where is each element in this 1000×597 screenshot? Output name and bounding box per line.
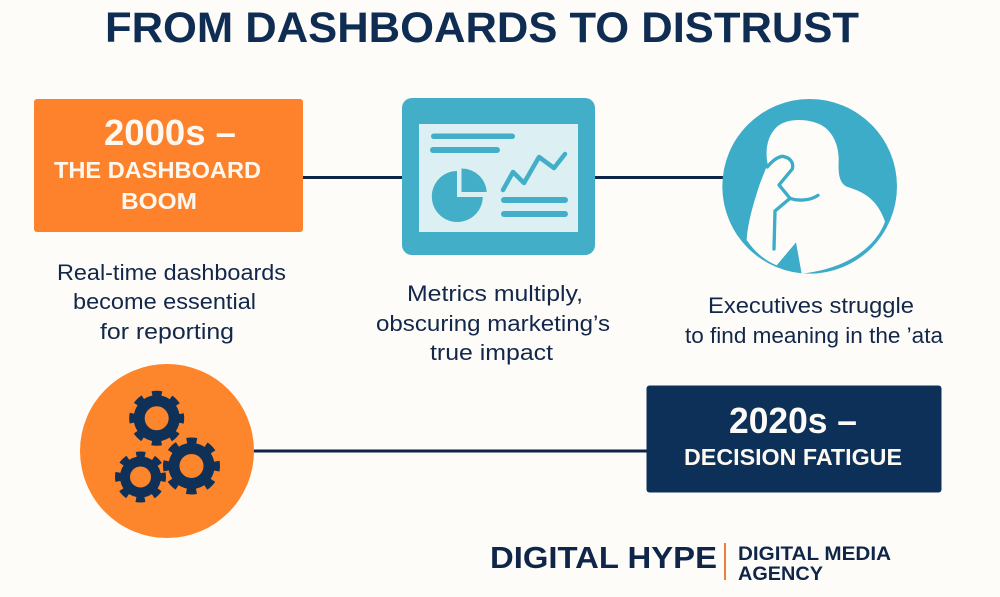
title: FROM DASHBOARDS TO DISTRUST bbox=[105, 4, 859, 52]
text: metrics multiply bbox=[376, 281, 610, 365]
text: real-time dashboards: Real-time dashboards bbox=[57, 260, 286, 285]
connector: gears to decision fatigue bbox=[253, 450, 648, 452]
heading: 2000s: 2000s – bbox=[104, 112, 236, 153]
subheading: the dashboard boom: BOOM bbox=[121, 188, 197, 214]
heading: 2020s: 2020s – bbox=[729, 400, 857, 441]
connector: dashboard boom to dashboard icon bbox=[302, 176, 404, 179]
logo tagline: AGENCY bbox=[738, 564, 823, 585]
text: real-time dashboards: become essential bbox=[73, 289, 256, 314]
icon: dashboard screen bbox=[402, 98, 595, 255]
connector: dashboard icon to executive icon bbox=[594, 176, 724, 179]
gear: bottom left bbox=[118, 455, 162, 499]
text: real-time dashboards bbox=[57, 260, 286, 344]
logo: digital hype: DIGITAL HYPE bbox=[490, 540, 717, 575]
icon: executive with hand on face bbox=[722, 99, 897, 274]
icon: gears in orange circle bbox=[80, 364, 254, 538]
gear: top bbox=[133, 394, 181, 442]
subheading: the dashboard boom: THE DASHBOARD bbox=[54, 157, 261, 183]
logo tagline: DIGITAL MEDIA bbox=[738, 544, 891, 565]
gear: bottom right bbox=[166, 441, 216, 491]
text: metrics multiply: obscuring marketing’s bbox=[376, 311, 610, 336]
text: real-time dashboards: for reporting bbox=[100, 319, 234, 344]
subheading: decision fatigue: DECISION FATIGUE bbox=[684, 444, 902, 470]
text: executives struggle: to find meaning in the ’ata bbox=[685, 323, 944, 348]
logo tagline bbox=[738, 544, 891, 585]
text: metrics multiply: true impact bbox=[430, 340, 553, 365]
logo: digital hype bbox=[490, 540, 891, 585]
panel: 2020s decision fatigue bbox=[646, 386, 942, 492]
chart: trend line bbox=[503, 154, 565, 190]
text: executives struggle: Executives struggle bbox=[708, 293, 914, 318]
text: metrics multiply: Metrics multiply, bbox=[407, 281, 583, 306]
text: executives struggle bbox=[685, 293, 944, 348]
subheading: the dashboard boom bbox=[54, 157, 261, 214]
chart: pie bbox=[432, 168, 487, 222]
panel: 2000s the dashboard boom bbox=[34, 99, 303, 232]
